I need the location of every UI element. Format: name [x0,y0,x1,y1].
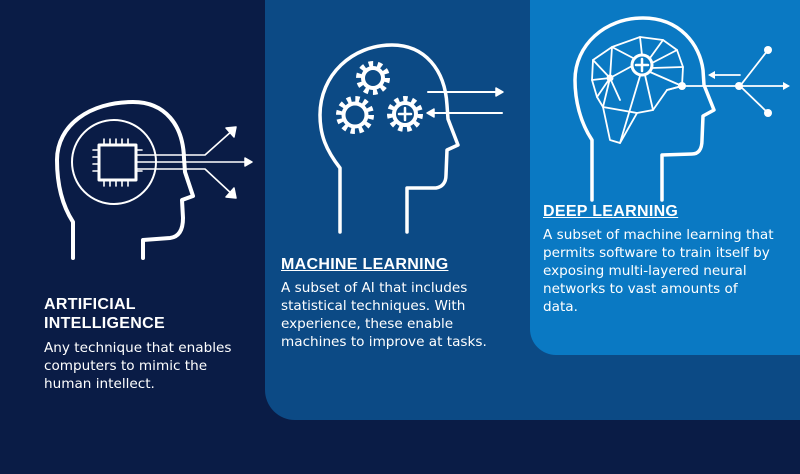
body: DL: A subset of machine learning that permits software to train itself by exposing multi-layered neural networks to vast amounts of data. [543,227,774,315]
body: ML: A subset of AI that includes statistical techniques. With experience, these enable machines to improve at tasks. [281,280,487,350]
heading: AI: ARTIFICIAL [44,296,136,313]
panel: machine learning background [265,0,800,420]
body: AI: Any technique that enables computers to mimic the human intellect. [44,340,231,392]
icon: AI head with chip [57,102,252,258]
icon: ML head with gears [320,45,503,232]
heading: DL: DEEP LEARNING [543,203,678,220]
heading: AI [44,296,165,332]
icon: DL head with neural brain [575,18,790,200]
text: machine learning [281,256,487,350]
heading: AI: INTELLIGENCE [44,315,165,332]
heading: ML: MACHINE LEARNING [281,256,448,273]
text: artificial intelligence [44,296,231,392]
text: deep learning [543,203,774,315]
panel: deep learning background [530,0,800,355]
